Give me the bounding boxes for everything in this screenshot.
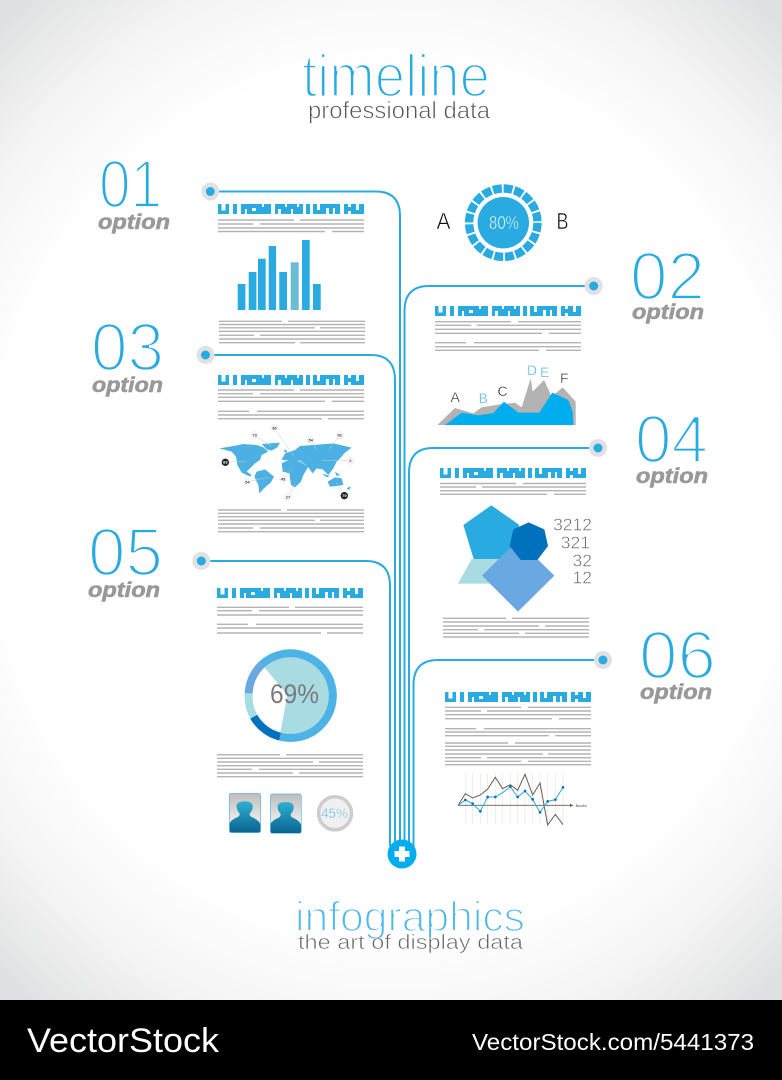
panel: section 02 — [435, 188, 581, 425]
footer: image id: VectorStock.com/5441373 — [472, 1029, 754, 1055]
label 01: 01 — [99, 146, 162, 222]
panel: section 06 — [445, 692, 591, 825]
area chart: B — [478, 390, 488, 406]
polygon diagram — [458, 505, 554, 612]
text block 05a — [217, 607, 363, 633]
label 05: 05 — [88, 514, 163, 590]
number list: 12 — [573, 568, 592, 588]
badge 45%: 45% — [321, 805, 348, 821]
area chart: E — [540, 364, 549, 380]
timeline connector lines — [209, 192, 596, 846]
label 06: 06 — [639, 618, 716, 694]
label 01: option — [98, 211, 170, 234]
label B: B — [556, 208, 568, 234]
world map: 27 — [286, 494, 291, 499]
text block 04a — [440, 484, 586, 494]
heading block 02 — [435, 306, 581, 316]
number list: 321 — [561, 533, 590, 553]
pie chart 69% — [249, 653, 333, 738]
panel: section 01 — [218, 204, 365, 343]
icon: plus button — [388, 840, 416, 868]
heading block 03 — [218, 375, 364, 385]
label 04: 04 — [635, 402, 708, 478]
label 02: option — [632, 301, 704, 324]
world map: 36 — [272, 426, 277, 431]
text block 02a — [435, 322, 581, 350]
heading block 01 — [218, 204, 364, 214]
node 01 — [201, 182, 219, 200]
bottom title: the art of display data — [298, 932, 524, 954]
label 03: 03 — [91, 310, 164, 386]
donut gauge 80%: 80% — [489, 213, 519, 233]
donut gauge 80% — [469, 188, 538, 257]
panel: section 05 — [217, 588, 363, 833]
world map: 45 — [281, 476, 286, 481]
world map: 2 — [349, 458, 352, 463]
world map: 79 — [342, 493, 347, 498]
number list: 32 — [573, 550, 592, 570]
number list — [553, 515, 592, 588]
badge 45% — [318, 797, 352, 830]
node 05 — [192, 552, 210, 570]
line chart: Books — [576, 804, 587, 808]
panel: section 04 — [440, 468, 592, 637]
label 03: option — [92, 374, 163, 397]
label A: A — [436, 208, 451, 234]
heading block 04 — [440, 468, 586, 478]
panel: section 03 — [218, 375, 364, 532]
world map: 54 — [308, 437, 314, 442]
text block 03a — [218, 390, 364, 419]
text block 01a — [218, 220, 364, 232]
world map: 73 — [252, 433, 258, 438]
text block 06a — [445, 707, 591, 765]
area chart: D — [527, 362, 537, 378]
text block 04b — [443, 618, 589, 637]
avatars — [229, 793, 301, 833]
pie chart 69%: 69% — [270, 679, 319, 709]
bottom title: infographics — [295, 893, 525, 940]
world map: 54 — [245, 479, 250, 484]
area chart: A — [450, 389, 460, 405]
label 06: option — [640, 681, 712, 704]
text block 05b — [217, 755, 363, 777]
area chart: C — [498, 383, 508, 399]
footer: brand: VectorStock — [27, 1022, 220, 1060]
world map — [219, 425, 354, 501]
number list: 3212 — [553, 515, 592, 535]
heading block 06 — [445, 692, 591, 702]
text block 03b — [218, 510, 364, 532]
label 02: 02 — [630, 238, 705, 314]
world map: 92 — [337, 433, 343, 438]
heading block 05 — [217, 588, 363, 598]
label 04: option — [636, 465, 708, 488]
text block 01b — [219, 321, 365, 343]
title: timeline — [302, 42, 490, 110]
world map: 83 — [223, 460, 228, 465]
line chart — [458, 773, 587, 825]
bar chart — [238, 240, 321, 310]
label 05: option — [88, 579, 160, 602]
footer band — [0, 1000, 782, 1080]
area chart — [437, 362, 576, 425]
area chart: F — [560, 370, 569, 386]
node 04 — [589, 439, 607, 457]
node 03 — [196, 346, 214, 364]
node 06 — [594, 651, 612, 669]
title: professional data — [308, 98, 491, 124]
node 02 — [585, 277, 603, 295]
